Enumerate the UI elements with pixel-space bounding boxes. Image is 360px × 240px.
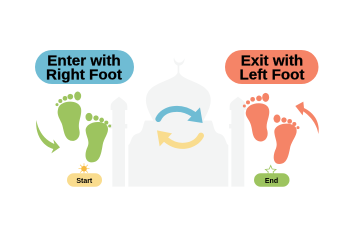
- icon: star: [265, 166, 276, 176]
- cycle arrows: [157, 107, 203, 146]
- pill: exit with left foot: Exit with: [241, 52, 303, 69]
- end label: End: [265, 178, 278, 185]
- red footprints and arrow: [243, 93, 319, 164]
- green curved arrow: [36, 120, 60, 153]
- mosque silhouette: [110, 57, 246, 187]
- red curved arrow: [295, 102, 319, 134]
- start label: Start: [76, 178, 93, 185]
- pill: exit with left foot: Left Foot: [240, 67, 304, 84]
- green footprints and arrow: [36, 91, 111, 162]
- main hall: [128, 64, 228, 187]
- pill: enter with right foot: Enter with: [47, 52, 121, 69]
- icon: sun: [78, 163, 90, 174]
- pill: enter with right foot: [35, 50, 134, 84]
- upper red foot: [243, 93, 269, 141]
- lower red foot: [273, 114, 299, 164]
- start label: [67, 173, 102, 187]
- lower green foot: [85, 113, 111, 162]
- end label: [254, 173, 290, 187]
- left minaret: [110, 97, 127, 187]
- blue arrow: [158, 107, 203, 123]
- right minaret: [229, 97, 246, 187]
- pill: exit with left foot: [225, 50, 318, 84]
- pill: enter with right foot: Right Foot: [46, 67, 122, 84]
- yellow arrow: [157, 130, 201, 146]
- upper green foot: [55, 91, 81, 141]
- crescent: [174, 57, 185, 66]
